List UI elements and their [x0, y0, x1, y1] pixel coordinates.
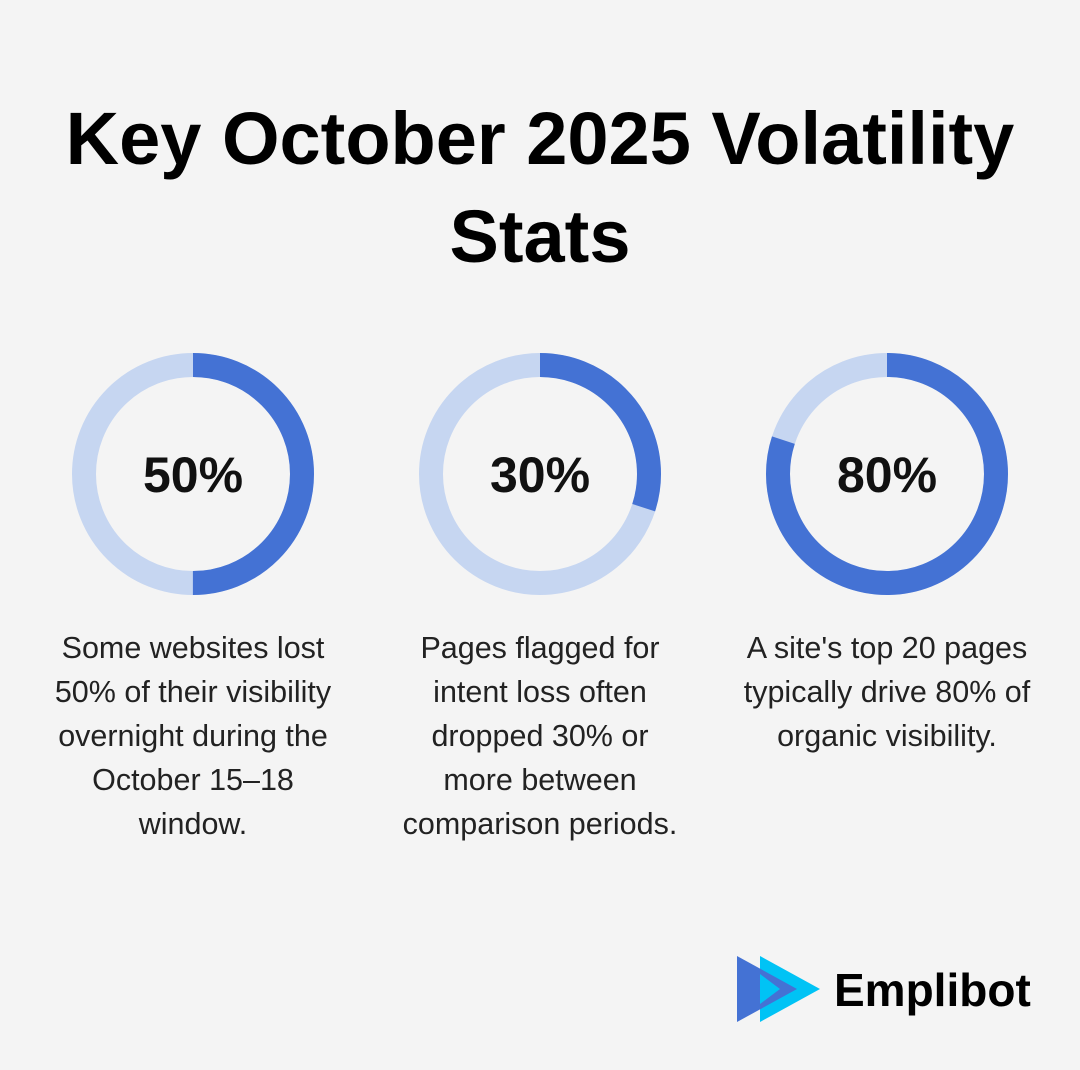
caption: 50%: overnight during the: [58, 719, 328, 753]
caption: 30%: Pages flagged for: [420, 631, 660, 665]
caption: 80%: typically drive 80% of: [744, 675, 1030, 709]
caption: 50%: [55, 631, 331, 841]
caption: 80%: organic visibility.: [777, 719, 997, 753]
donut: 80%: [766, 353, 1008, 595]
title: Stats: [450, 195, 630, 278]
logo: Emplibot: [834, 964, 1031, 1016]
donut: 50%: [72, 353, 314, 595]
donut: 30%: [419, 353, 661, 595]
caption: 50%: Some websites lost: [62, 631, 324, 665]
caption: 50%: window.: [139, 807, 247, 841]
caption: 30%: [403, 631, 677, 841]
caption: 30%: more between: [443, 763, 637, 797]
donut: 80%: 80%: [837, 447, 937, 503]
title: [66, 97, 1014, 278]
caption: 30%: intent loss often: [433, 675, 647, 709]
caption: 50%: October 15–18: [92, 763, 294, 797]
caption: 80%: A site's top 20 pages: [747, 631, 1027, 665]
donut: 50%: 50%: [143, 447, 243, 503]
caption: 50%: 50% of their visibility: [55, 675, 331, 709]
donut: 30%: 30%: [490, 447, 590, 503]
caption: 80%: [744, 631, 1030, 753]
caption: 30%: dropped 30% or: [431, 719, 649, 753]
title: Key October 2025 Volatility: [66, 97, 1014, 180]
caption: 30%: comparison periods.: [403, 807, 677, 841]
logo: [737, 956, 1031, 1022]
